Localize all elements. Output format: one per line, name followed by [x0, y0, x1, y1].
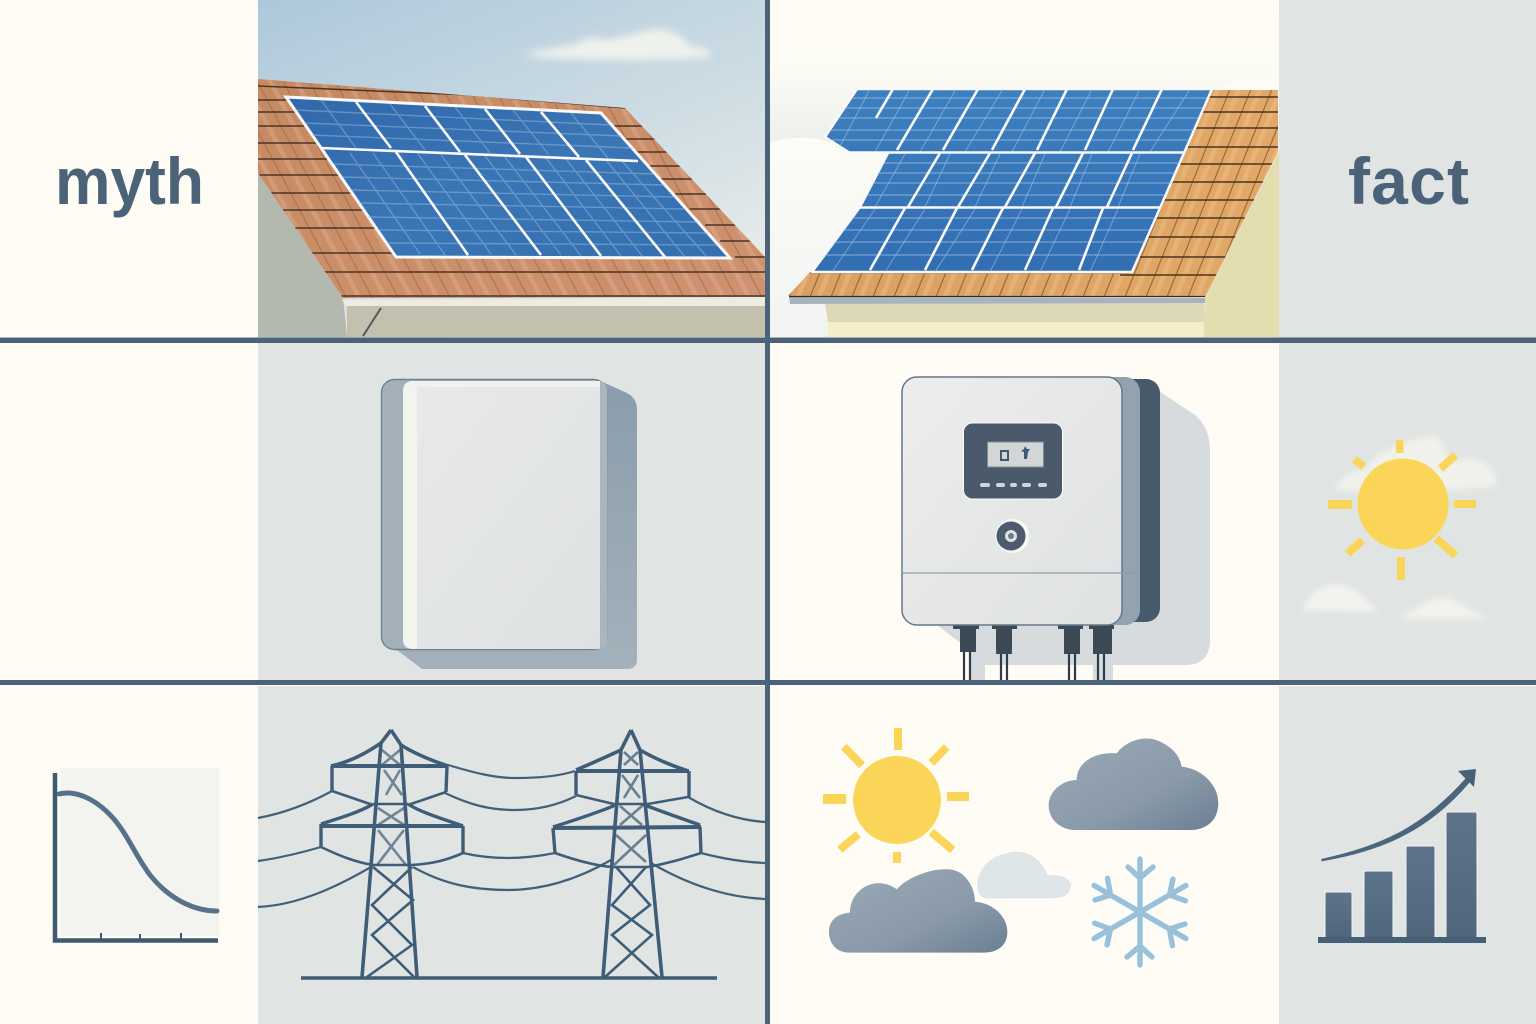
panel: sun with clouds [1279, 343, 1536, 681]
front wall [347, 306, 766, 337]
trend arrow [1322, 769, 1476, 860]
panel: myth label [0, 0, 258, 338]
icon: cloud left [770, 138, 900, 337]
panel: inverter [770, 343, 1279, 681]
solar array [286, 97, 730, 258]
left highlight [403, 381, 417, 649]
inverter back [1118, 379, 1160, 622]
wires [258, 765, 765, 907]
panel: myth roof with solar array [258, 0, 766, 338]
battery body [382, 380, 606, 650]
connectors [953, 625, 1114, 654]
icon: sun [823, 728, 969, 863]
roof [788, 90, 1278, 297]
power button [996, 519, 1030, 553]
baseline [1318, 937, 1486, 943]
solar array [800, 89, 1220, 272]
panel: home battery [258, 343, 766, 681]
top highlight [413, 381, 600, 387]
inverter shadow [930, 385, 1210, 680]
battery front [403, 381, 607, 649]
axes [55, 773, 218, 940]
panel: fact roof with solar array [770, 89, 1279, 337]
icon: storm cloud lower left [829, 869, 1007, 953]
chart plot background [60, 768, 219, 936]
tower left [321, 730, 463, 977]
icon: snowflake [1088, 859, 1192, 965]
heading: fact: fact [1348, 144, 1469, 218]
right edge [600, 381, 607, 649]
battery shadow [381, 379, 637, 669]
tower right [553, 730, 701, 977]
indicator lights [980, 483, 1047, 487]
gutter [342, 299, 765, 306]
panel: weather conditions [770, 686, 1279, 1024]
icon: storm cloud upper right [1049, 739, 1218, 830]
curve [59, 793, 217, 911]
front wall [825, 303, 1204, 323]
side wall [258, 173, 347, 337]
panel: transmission towers [258, 686, 766, 1024]
icon: cloud top right [1215, 75, 1279, 92]
ground line [301, 976, 717, 980]
icon: lower clouds [1302, 584, 1490, 618]
icon: pale cloud [977, 852, 1071, 898]
bars [1325, 812, 1477, 938]
inverter front [902, 377, 1122, 625]
downpipe [363, 308, 381, 336]
panel: declining output chart [0, 686, 258, 1024]
display [988, 442, 1044, 467]
seam [903, 572, 1138, 574]
icon: sun [1328, 440, 1476, 580]
side wall [1203, 152, 1279, 337]
icon: clouds behind sun [1335, 436, 1497, 491]
panel: rising bar chart [1279, 686, 1536, 1024]
heading: myth: myth [55, 144, 204, 218]
panel: row 2 empty myth cell [0, 343, 258, 681]
roof [258, 79, 765, 298]
panel: fact label [1279, 0, 1536, 338]
inverter side [1100, 377, 1140, 625]
ticks [101, 933, 181, 939]
control screen [964, 423, 1062, 499]
cables [964, 650, 1104, 680]
icon: cloud in sky [525, 29, 710, 60]
gutter [789, 297, 1205, 304]
